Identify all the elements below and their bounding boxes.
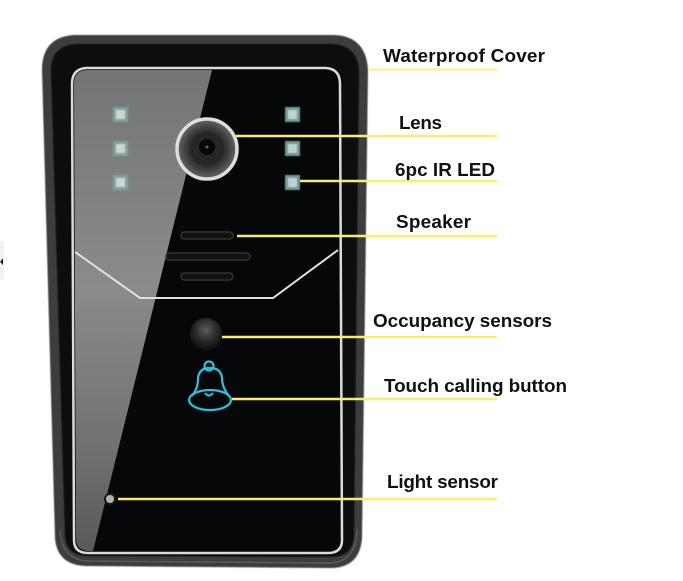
glossy reflection (74, 70, 212, 551)
label: Touch calling button: Touch calling button (384, 376, 567, 397)
occupancy sensor (190, 318, 222, 350)
left edge page arrow (0, 241, 4, 280)
label: Light sensor: Light sensor (387, 472, 499, 493)
panel V line (75, 250, 338, 298)
IR LEDs (113, 107, 300, 190)
label: Waterproof Cover: Waterproof Cover (383, 46, 546, 67)
light sensor (104, 493, 116, 505)
label: Speaker: Speaker (396, 212, 472, 233)
label: Occupancy sensors: Occupancy sensors (373, 311, 552, 332)
housing lower stripe (60, 530, 357, 563)
housing inner rim (51, 44, 359, 557)
bell icon (189, 362, 231, 410)
device housing (42, 35, 368, 568)
speaker grille (166, 232, 250, 280)
label: 6pc IR LED: 6pc IR LED (395, 160, 495, 181)
front panel (72, 68, 342, 553)
label: Lens: Lens (399, 113, 442, 134)
camera lens (177, 119, 237, 179)
